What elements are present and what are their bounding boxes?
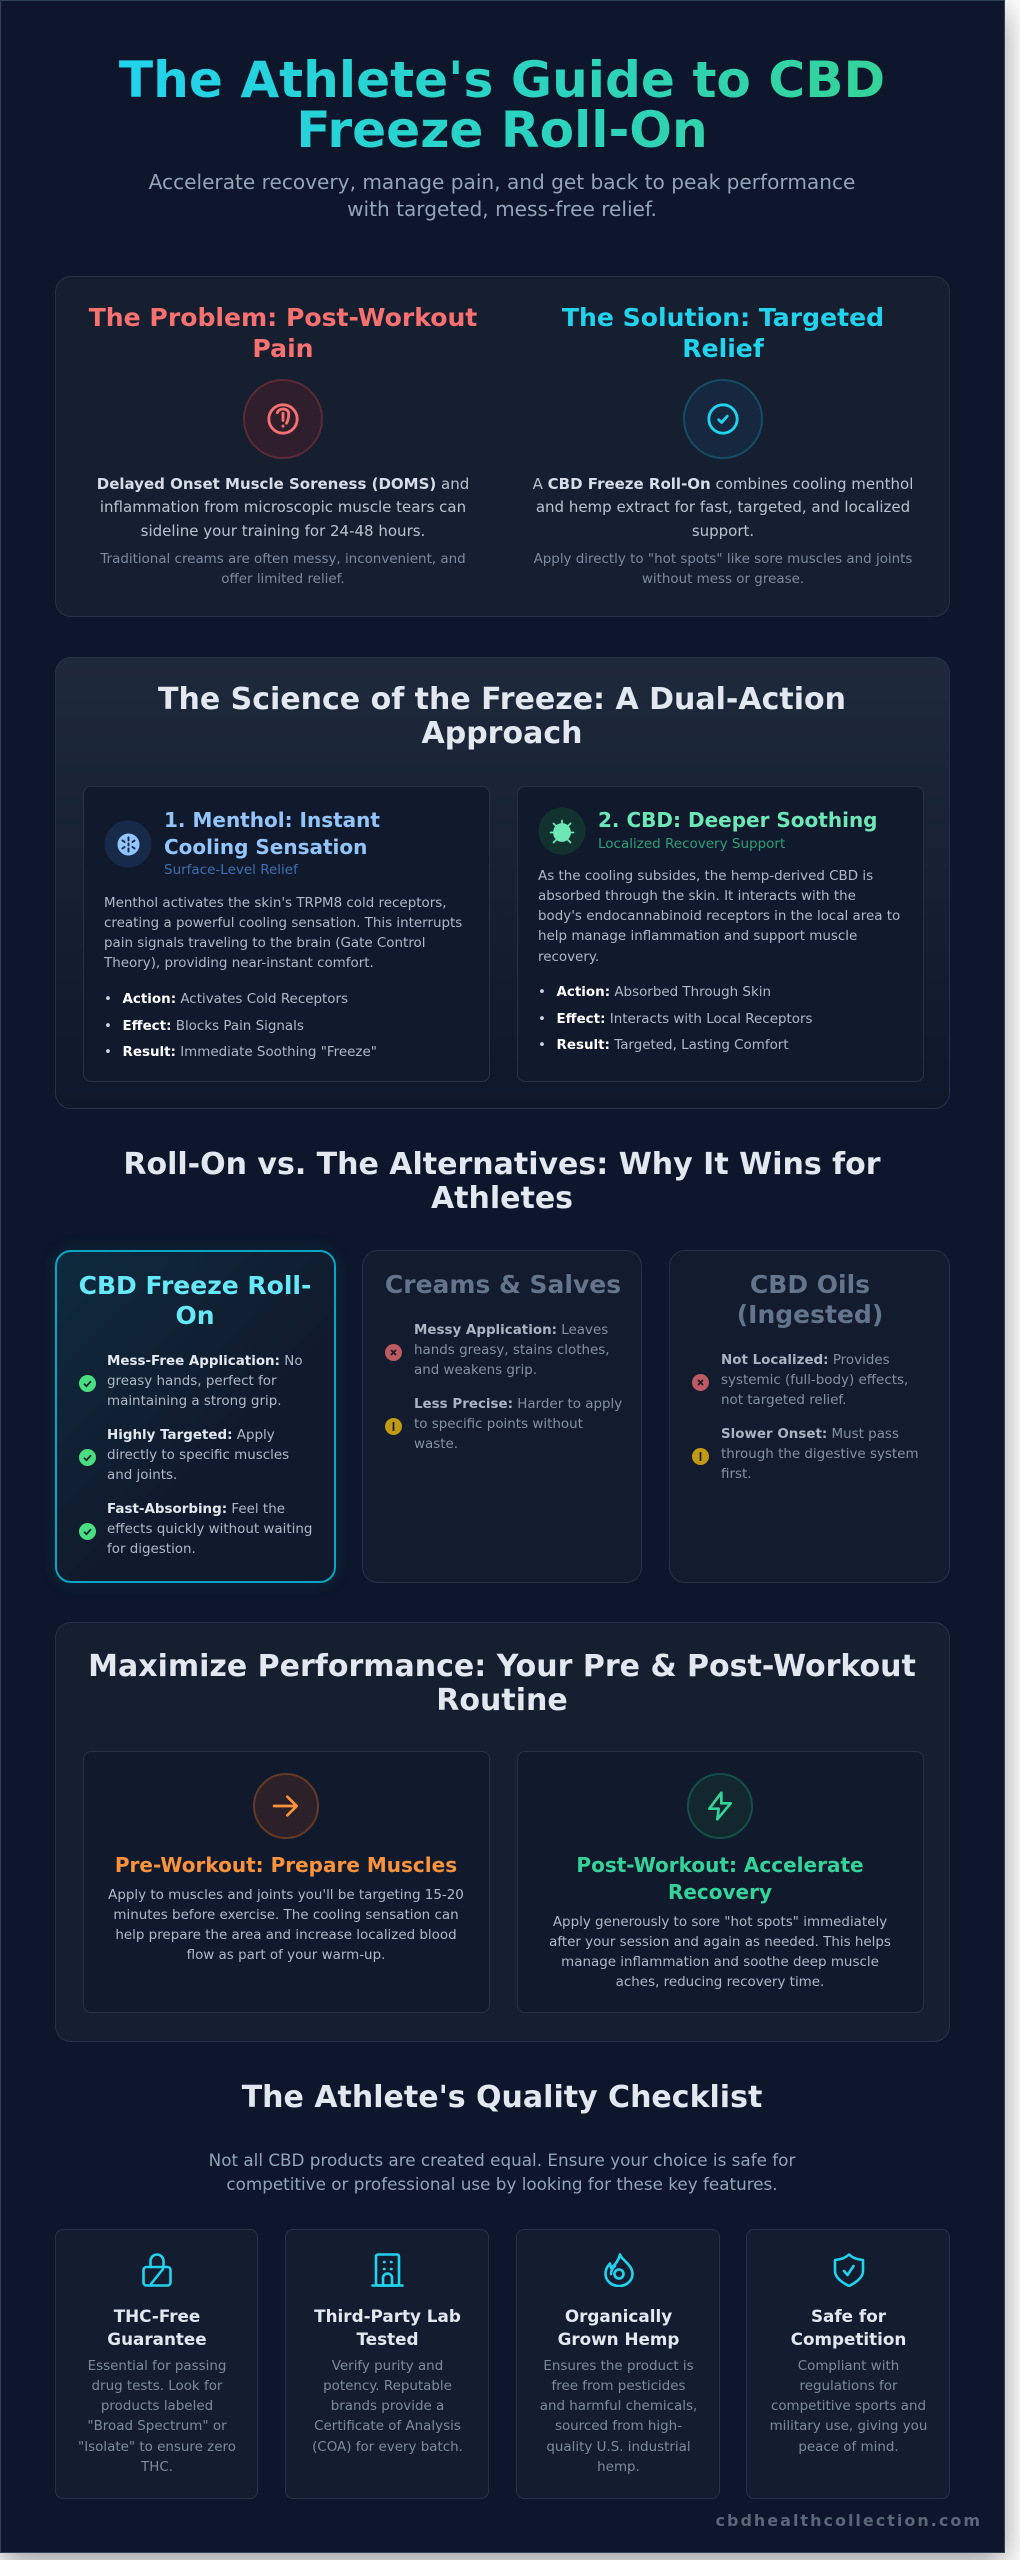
text [414,1323,610,1378]
text: problem note: Traditional creams are often messy, inconvenient, and [100,552,466,567]
list: cbd action, effect, result: Result: Targeted, Lasting Comfort [556,1038,789,1053]
text: menthol description: Menthol activates the skin's TRPM8 cold receptors, [104,896,447,911]
panel: problem and solution [55,276,950,617]
heading [107,2305,207,2352]
text: post-workout description: Apply generously to sore "hot spots" immediately [553,1915,887,1930]
card: menthol [83,786,490,1082]
text: checklist intro [209,2148,795,2196]
text: drug tests. Look for [92,2379,222,2394]
icon: cross [385,1344,402,1361]
heading: routine: Routine [436,1683,568,1718]
icon: cbd soothing [538,808,586,854]
heading: the solution [562,303,884,363]
text: solution note: without mess or grease. [642,572,804,587]
item: messy application [385,1323,610,1378]
text: systemic (full-body) effects, [721,1373,908,1388]
heading: THC-Free [114,2306,200,2326]
heading: pre-workout: Pre-Workout: Prepare Muscles [115,1853,457,1877]
heading: menthol [164,808,380,859]
heading: the problem: The Problem: Post-Workout [89,303,477,332]
text: pre-workout description: flow as part of your warm-up. [187,1948,385,1963]
text [540,2357,697,2478]
text: cbd description: help manage inflammation and support muscle [538,929,857,944]
title [119,55,885,156]
label: localized recovery support: Localized Recovery Support [598,836,785,852]
item: highly targeted [79,1428,289,1483]
text [107,1428,289,1483]
heading: the problem: Pain [252,334,314,363]
text: Messy Application: Leaves [414,1323,608,1338]
card: organic hemp [516,2229,720,2499]
text: sourced from high- [555,2419,682,2434]
text [414,1397,622,1452]
text [770,2357,927,2458]
text: cbd description: body's endocannabinoid receptors in the local area to [538,909,900,924]
icon: cooling snowflake [104,820,152,868]
text: THC. [141,2460,173,2475]
text: menthol description [104,896,462,971]
text: for digestion. [107,1542,196,1557]
text: competitive sports and [771,2399,926,2414]
text: (COA) for every batch. [312,2440,463,2455]
title: Freeze Roll-On [296,100,708,159]
heading: post-workout: Post-Workout: Accelerate [576,1853,864,1877]
text: "Isolate" to ensure zero [78,2440,236,2455]
text: to specific points without [414,1417,583,1432]
heading: routine [88,1649,916,1718]
heading: Organically [565,2306,672,2326]
text: first. [721,1467,752,1482]
text: not targeted relief. [721,1393,846,1408]
item: mess-free [79,1354,303,1409]
text: brands provide a [331,2399,444,2414]
text: Less Precise: Harder to apply [414,1397,622,1412]
heading: cbd: 2. CBD: Deeper Soothing [598,808,878,832]
heading: Tested [356,2329,418,2349]
text: "Broad Spectrum" or [87,2419,227,2434]
icon: cross [692,1374,709,1391]
text: Essential for passing [88,2359,226,2374]
list: cbd action, effect, result: • [538,985,546,1000]
text: solution body: A CBD Freeze Roll-On combines cooling menthol [533,475,913,493]
item: fast-absorbing [79,1502,312,1557]
heading: routine: Maximize Performance: Your Pre & Post-Workout [88,1649,916,1684]
text: pre-workout description: minutes before exercise. The cooling sensation can [113,1908,459,1923]
subtitle: Accelerate recovery, manage pain, and get back to peak performance [149,170,855,194]
list: menthol action, effect, result: • [104,1045,112,1060]
label: surface-level relief: Surface-Level Relief [164,862,298,878]
list: cbd action, effect, result: • [538,1038,546,1053]
icon: check [79,1523,96,1540]
title: The Athlete's Guide to CBD [119,50,885,109]
heading [791,2305,906,2352]
list: menthol action, effect, result: • [104,992,112,1007]
text: problem body: Delayed Onset Muscle Soreness (DOMS) and [97,475,469,493]
list: menthol action, effect, result: Effect: Blocks Pain Signals [122,1019,304,1034]
text: menthol description: pain signals traveling to the brain (Gate Control [104,936,426,951]
text: and harmful chemicals, [540,2399,697,2414]
text: cbd description: As the cooling subsides, the hemp-derived CBD is [538,869,873,884]
panel: science of the freeze [55,657,950,1109]
heading: menthol: Cooling Sensation [164,835,367,859]
icon: lightning bolt [687,1773,753,1839]
text: cbd description [538,869,900,965]
text: Not Localized: Provides [721,1353,890,1368]
card: cbd [517,786,924,1082]
heading: oils [737,1270,883,1329]
icon: check [79,1449,96,1466]
text: post-workout description: manage inflammation and soothe deep muscle [561,1955,879,1970]
text [721,1427,919,1482]
heading: post-workout [576,1853,864,1904]
text: Highly Targeted: Apply [107,1428,275,1443]
text: problem body [97,475,469,540]
text: potency. Reputable [323,2379,452,2394]
panel: workout routine [55,1622,950,2042]
card: thc-free [55,2229,258,2499]
heading: the solution: The Solution: Targeted [562,303,884,332]
item: slower onset [692,1427,919,1482]
heading: Grown Hemp [558,2329,679,2349]
heading: oils: (Ingested) [737,1300,883,1329]
heading: roll-on [79,1271,311,1330]
heading: the problem [88,303,477,363]
text [107,1354,303,1409]
card: post-workout [517,1751,924,2013]
heading: Third-Party Lab [314,2306,461,2326]
heading: Safe for [811,2306,886,2326]
text: problem body: inflammation from microscopic muscle tears can [100,498,466,516]
list: cbd action, effect, result: • [538,1012,546,1027]
list: cbd action, effect, result: Effect: Interacts with Local Receptors [556,1012,813,1027]
text: solution body: support. [692,522,754,540]
text: menthol description: creating a powerful cooling sensation. This interrupts [104,916,462,931]
list: menthol action, effect, result: Result: Immediate Soothing "Freeze" [122,1045,377,1060]
heading: menthol: 1. Menthol: Instant [164,808,380,832]
text: and joints. [107,1468,177,1483]
text: Compliant with [798,2359,899,2374]
text [78,2357,236,2478]
text: quality U.S. industrial [546,2440,691,2455]
text: cbd description: recovery. [538,950,599,965]
text: maintaining a strong grip. [107,1394,282,1409]
text: free from pesticides [551,2379,686,2394]
text: greasy hands, perfect for [107,1374,277,1389]
text: pre-workout description: help prepare the area and increase localized blood [115,1928,457,1943]
text: regulations for [799,2379,897,2394]
text: peace of mind. [798,2440,899,2455]
text: directly to specific muscles [107,1448,289,1463]
heading: the solution: Relief [682,334,764,363]
text: post-workout description [549,1913,891,1994]
icon: solution check [683,379,763,459]
list: menthol action, effect, result [104,992,377,1060]
text: solution body [532,475,913,540]
text: solution note [534,552,912,587]
text: checklist intro: competitive or professional use by looking for these key features. [226,2174,778,2194]
heading: Guarantee [107,2329,207,2349]
icon: lab building [371,2253,404,2287]
list: cbd action, effect, result: Action: Absorbed Through Skin [556,985,771,1000]
item: not localized [692,1353,908,1408]
heading: creams: Creams & Salves [385,1270,621,1299]
heading: roll-on: CBD Freeze Roll- [79,1271,311,1300]
heading: Competition [791,2329,906,2349]
heading: oils: CBD Oils [750,1270,870,1299]
text [312,2357,463,2458]
text: Verify purity and [332,2359,443,2374]
text: menthol description: Theory), providing near-instant comfort. [104,956,374,971]
text: problem body: sideline your training for 24-48 hours. [141,522,425,540]
text: Slower Onset: Must pass [721,1427,899,1442]
card: safe for competition [746,2229,950,2499]
text: checklist intro: Not all CBD products are created equal. Ensure your choice is safe for [209,2150,795,2170]
heading: science: The Science of the Freeze: A Dual-Action [158,682,846,717]
text: military use, giving you [770,2419,927,2434]
heading [558,2305,679,2352]
card: cbd freeze roll-on [55,1250,336,1583]
icon: flame [604,2253,634,2287]
icon: pain alert [243,379,323,459]
text: hemp. [597,2460,640,2475]
text: problem note: offer limited relief. [221,572,345,587]
text: Mess-Free Application: No [107,1354,303,1369]
text: Certificate of Analysis [314,2419,461,2434]
text: effects quickly without waiting [107,1522,312,1537]
text: and weakens grip. [414,1363,537,1378]
text [107,1502,312,1557]
heading: comparison [123,1147,881,1216]
text: problem note [100,552,466,587]
footer: website: cbdhealthcollection.com [716,2511,982,2530]
text: pre-workout description [108,1888,464,1963]
text: cbd description: absorbed through the skin. It interacts with the [538,889,856,904]
icon: arrow [253,1773,319,1839]
subtitle [148,170,855,221]
heading: roll-on: On [175,1301,215,1330]
heading: science [158,682,846,751]
text: solution note: Apply directly to "hot spots" like sore muscles and joints [534,552,912,567]
icon: shield check [832,2253,864,2287]
text: through the digestive system [721,1447,919,1462]
list: menthol action, effect, result: • [104,1019,112,1034]
text: pre-workout description: Apply to muscles and joints you'll be targeting 15-20 [108,1888,464,1903]
text: hands greasy, stains clothes, [414,1343,610,1358]
card: pre-workout [83,1751,490,2013]
list: cbd action, effect, result [538,985,813,1053]
text [721,1353,908,1408]
card: creams and salves [362,1250,642,1583]
list: menthol action, effect, result: Action: Activates Cold Receptors [122,992,348,1007]
icon: lock [142,2253,172,2287]
icon: warning [385,1418,402,1435]
text: products labeled [101,2399,213,2414]
text: Ensures the product is [543,2359,694,2374]
text: waste. [414,1437,458,1452]
card: lab tested [285,2229,489,2499]
text: post-workout description: after your session and again as needed. This helps [549,1935,891,1950]
heading [314,2305,461,2352]
subtitle: with targeted, mess-free relief. [347,197,657,221]
icon: check [79,1375,96,1392]
item: less precise [385,1397,622,1452]
heading: science: Approach [422,716,582,751]
card: cbd oils [669,1250,950,1583]
heading: post-workout: Recovery [668,1880,772,1904]
heading: comparison: Roll-On vs. The Alternatives: Why It Wins for [123,1147,881,1182]
heading: comparison: Athletes [431,1181,573,1216]
text: Fast-Absorbing: Feel the [107,1502,285,1517]
heading: quality checklist: The Athlete's Quality Checklist [242,2080,762,2115]
text: post-workout description: aches, reducing recovery time. [616,1975,824,1990]
text: solution body: and hemp extract for fast, targeted, and localized [536,498,910,516]
icon: warning [692,1448,709,1465]
